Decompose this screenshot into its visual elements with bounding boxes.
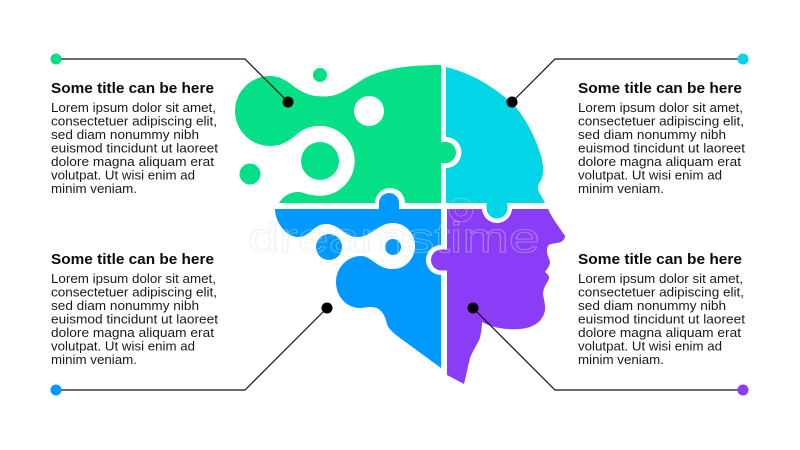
watermark	[248, 198, 540, 261]
text block: top right: euismod tincidunt ut laoreet	[578, 142, 746, 156]
puzzle piece: blue	[275, 209, 441, 368]
text block: bottom right: minim veniam.	[578, 353, 664, 367]
text block: bottom left: volutpat. Ut wisi enim ad	[51, 340, 195, 354]
text block: bottom right: consectetuer adipiscing elit,	[578, 286, 744, 300]
text block: top left	[51, 80, 219, 196]
text block: bottom left: euismod tincidunt ut laoreet	[51, 312, 219, 326]
text block: bottom left: Lorem ipsum dolor sit amet,	[51, 272, 216, 286]
connector: top left	[50, 54, 294, 108]
text block: top right: sed diam nonummy nibh	[578, 128, 726, 142]
text block: top left: volutpat. Ut wisi enim ad	[51, 168, 195, 182]
text block: bottom right: Lorem ipsum dolor sit amet,	[578, 272, 743, 286]
watermark: dreamstime	[248, 214, 540, 261]
puzzle tab: blue	[379, 193, 399, 212]
text block: bottom left: minim veniam.	[51, 353, 137, 367]
text block: bottom right: Some title can be here	[578, 251, 742, 268]
text block: top left: dolore magna aliquam erat	[51, 155, 215, 169]
text block: bottom left: dolore magna aliquam erat	[51, 326, 215, 340]
text block: top left: Lorem ipsum dolor sit amet,	[51, 101, 216, 115]
text block: top right: volutpat. Ut wisi enim ad	[578, 168, 722, 182]
puzzle piece: green	[235, 65, 456, 203]
text block: top right: minim veniam.	[578, 182, 664, 196]
text block: bottom left	[51, 251, 219, 367]
text block: top left: minim veniam.	[51, 182, 137, 196]
text block: bottom right: dolore magna aliquam erat	[578, 326, 742, 340]
text block: bottom left: sed diam nonummy nibh	[51, 299, 199, 313]
text block: top right: consectetuer adipiscing elit,	[578, 114, 744, 128]
connector: bottom left	[50, 302, 332, 396]
text block: bottom right	[578, 251, 746, 367]
text block: bottom left: Some title can be here	[51, 251, 214, 268]
text block: top left: sed diam nonummy nibh	[51, 128, 199, 142]
connector: bottom right	[468, 302, 748, 396]
text block: top right: Lorem ipsum dolor sit amet,	[578, 101, 743, 115]
text block: bottom right: sed diam nonummy nibh	[578, 299, 726, 313]
text block: top right: dolore magna aliquam erat	[578, 155, 742, 169]
text block: top left: consectetuer adipiscing elit,	[51, 114, 217, 128]
text block: top right: Some title can be here	[578, 80, 742, 97]
text block: top right	[578, 80, 746, 196]
text block: top left: Some title can be here	[51, 80, 214, 97]
puzzle piece: cyan	[446, 67, 545, 218]
text block: bottom right: euismod tincidunt ut laoreet	[578, 312, 746, 326]
connector: top right	[506, 54, 748, 108]
head puzzle illustration	[235, 65, 565, 384]
puzzle piece: purple	[431, 209, 565, 384]
text block: bottom right: volutpat. Ut wisi enim ad	[578, 340, 722, 354]
text block: bottom left: consectetuer adipiscing elit,	[51, 286, 217, 300]
text block: top left: euismod tincidunt ut laoreet	[51, 142, 219, 156]
